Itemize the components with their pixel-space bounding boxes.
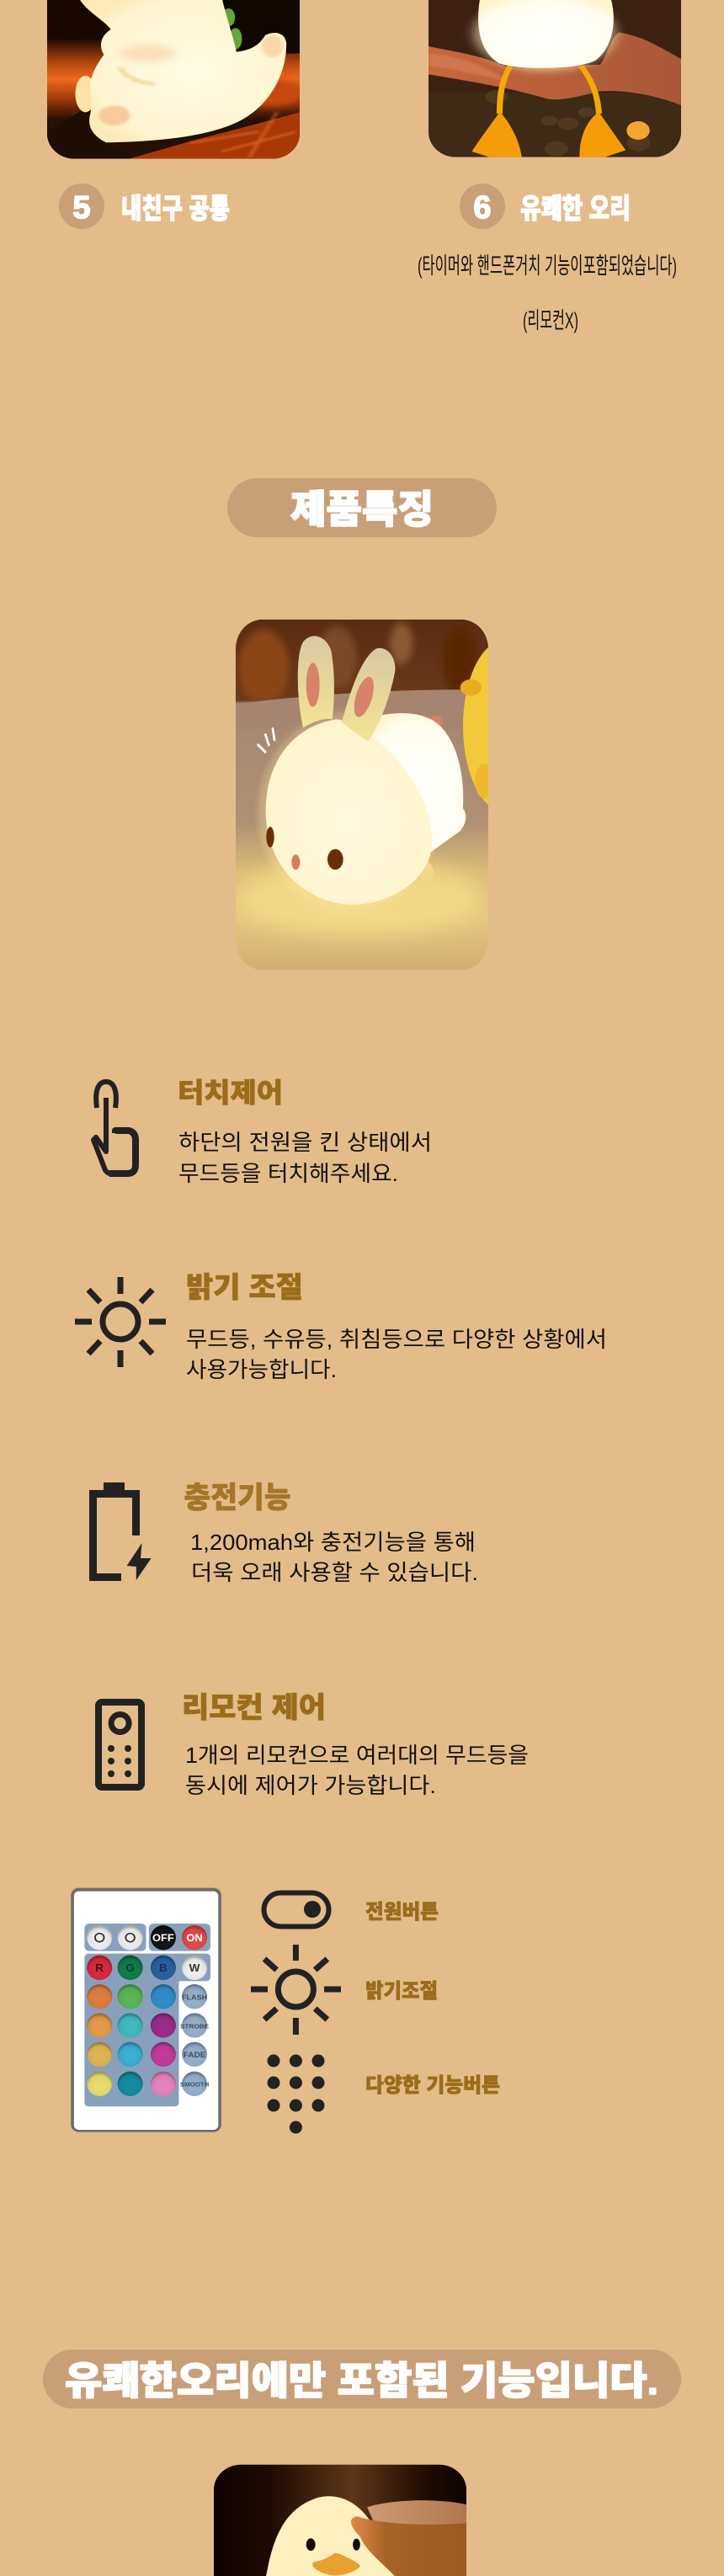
caption: 5 dinosaur	[59, 184, 230, 229]
remote buttons: STROBE	[180, 2023, 209, 2030]
motion ticks	[258, 729, 274, 752]
remote buttons	[87, 1925, 209, 2096]
section heading: duck only: 유쾌한오리에만 포함된 기능입니다.	[65, 2359, 658, 2403]
rabbit back	[365, 713, 466, 854]
description: 하단의 전원을 킨 상태에서	[178, 1130, 432, 1155]
fingers	[351, 2500, 466, 2576]
remote control picture	[71, 1888, 221, 2132]
photo: duck lamp on hand	[429, 0, 681, 157]
description: 무드등, 수유등, 취침등으로 다양한 상황에서	[186, 1327, 607, 1352]
feature: brightness	[75, 1272, 607, 1382]
feature: remote control	[98, 1692, 529, 1798]
remote buttons: SMOOTH	[180, 2081, 209, 2089]
number badge 6	[460, 184, 505, 229]
legend label: 다양한 기능버튼	[365, 2074, 500, 2097]
photo: dinosaur lamp	[47, 0, 305, 159]
section heading: duck only	[43, 2350, 681, 2408]
photo: duck lamp with finger	[214, 2465, 466, 2576]
label 5: 내친구 공룡	[121, 193, 230, 224]
number badge 5	[59, 184, 104, 229]
description	[185, 1743, 529, 1798]
icon: dots	[268, 2054, 325, 2133]
heading: 밝기 조절	[186, 1272, 303, 1304]
icon: sun	[75, 1277, 166, 1367]
floor glow	[236, 860, 482, 935]
note: no remote: (리모컨X)	[523, 308, 578, 333]
duck beak	[312, 2553, 360, 2576]
legend: power button	[264, 1892, 439, 1926]
description	[190, 1530, 478, 1585]
description: 더욱 오래 사용할 수 있습니다.	[191, 1560, 478, 1585]
legend: brightness	[251, 1945, 438, 2035]
feature: charging	[93, 1482, 478, 1585]
icon: sun	[251, 1945, 341, 2035]
remote buttons: FADE	[184, 2051, 206, 2060]
number badge 5: 5	[72, 190, 91, 226]
label 6: 유쾌한 오리	[520, 193, 631, 224]
icon: battery	[93, 1482, 152, 1580]
section heading: product features	[227, 478, 497, 537]
legend label: 전원버튼	[365, 1901, 439, 1924]
legend: function buttons	[268, 2054, 500, 2133]
description: 동시에 제어가 가능합니다.	[185, 1773, 436, 1798]
yellow chick	[460, 647, 488, 805]
description: 무드등을 터치해주세요.	[178, 1161, 398, 1186]
description	[186, 1327, 607, 1382]
duck head	[265, 2496, 402, 2576]
caption: 6 duck	[460, 184, 631, 229]
rabbit face	[266, 827, 343, 870]
remote buttons: OFF	[152, 1932, 174, 1944]
feature: touch control	[93, 1078, 432, 1186]
remote buttons: G	[125, 1961, 135, 1974]
heading: 충전기능	[184, 1482, 291, 1514]
heading: 리모컨 제어	[182, 1692, 326, 1724]
description: 1,200mah와 충전기능을 통해	[190, 1530, 476, 1555]
remote buttons: B	[159, 1961, 168, 1974]
remote buttons: FLASH	[182, 1993, 207, 2001]
icon: touch finger	[93, 1082, 136, 1174]
legend label: 밝기조절	[365, 1980, 438, 2003]
icon: remote	[98, 1702, 141, 1787]
rabbit left ear	[298, 636, 334, 728]
number badge 6: 6	[473, 190, 492, 226]
rabbit right ear	[342, 648, 395, 742]
remote buttons: W	[189, 1961, 200, 1974]
rabbit head	[266, 719, 432, 905]
pink tail	[429, 716, 443, 727]
duck eyes	[306, 2538, 360, 2551]
icon: toggle	[264, 1892, 328, 1926]
remote buttons: ON	[186, 1932, 203, 1944]
section heading: product features: 제품특징	[290, 487, 434, 531]
photo: rabbit lamp	[236, 620, 488, 970]
remote buttons: R	[95, 1961, 104, 1974]
description: 사용가능합니다.	[186, 1357, 337, 1382]
description	[178, 1130, 432, 1186]
heading: 터치제어	[178, 1078, 283, 1108]
description: 1개의 리모컨으로 여러대의 무드등을	[185, 1743, 529, 1768]
